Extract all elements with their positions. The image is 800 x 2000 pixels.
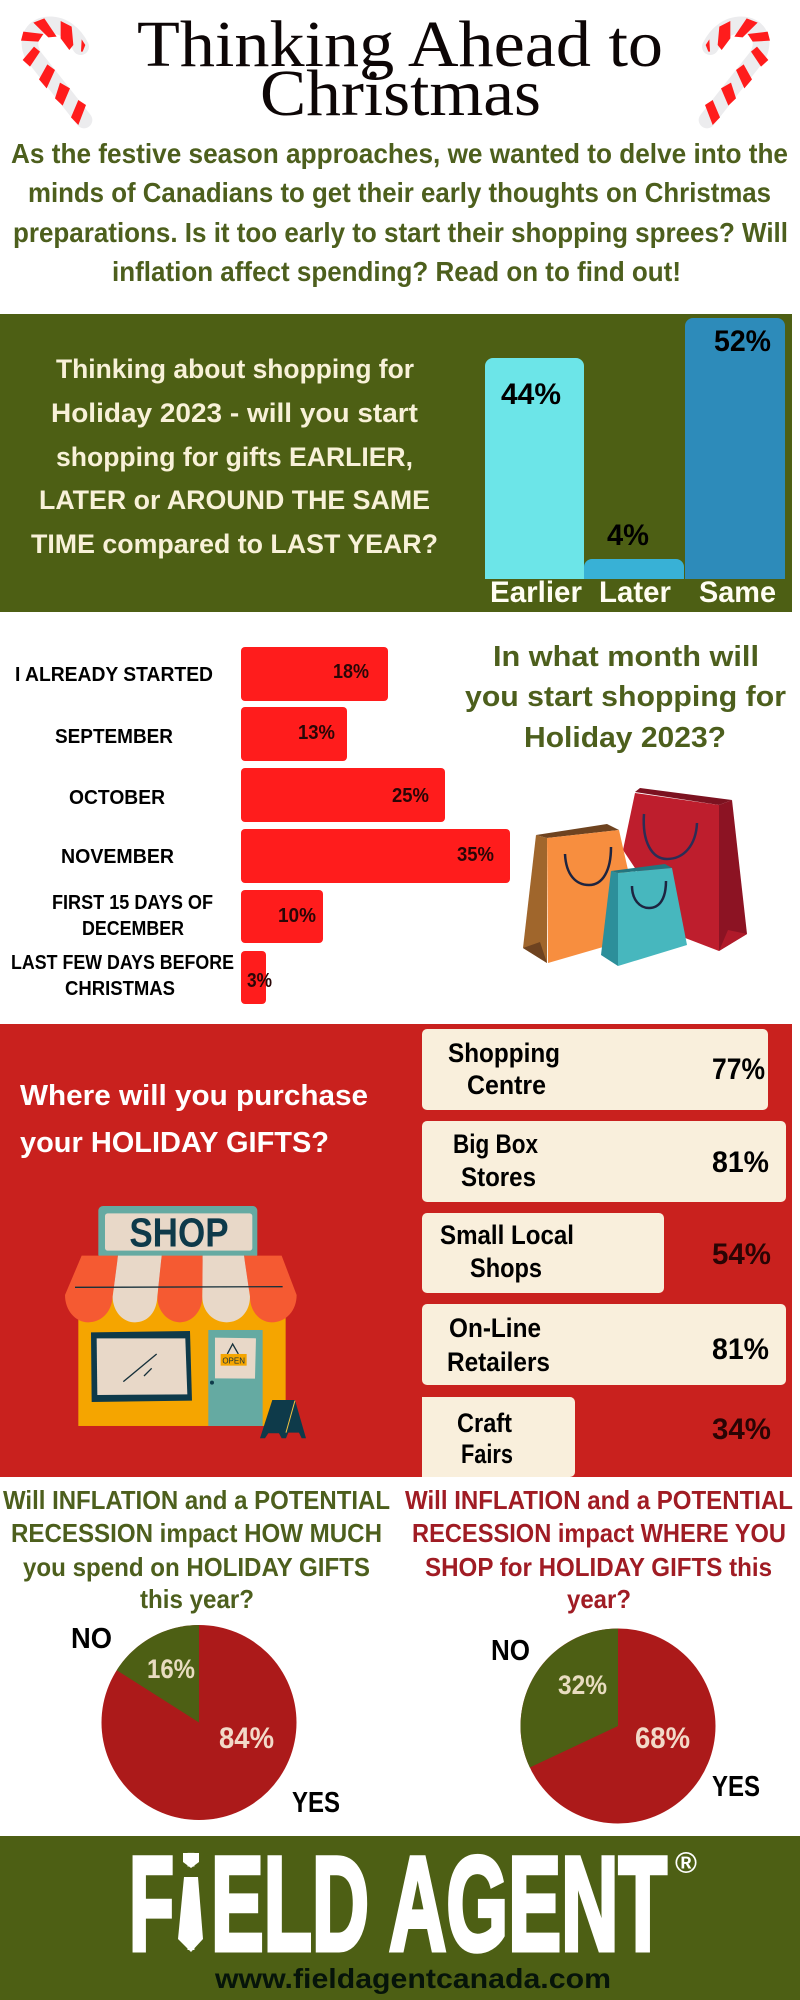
header [11, 8, 788, 287]
heading: purchase question: your HOLIDAY GIFTS? [20, 1127, 329, 1159]
bar: big box stores [422, 1121, 786, 1202]
heading: purchase question: Where will you purchase [20, 1080, 368, 1112]
heading: how much: RECESSION impact HOW MUCH [11, 1518, 382, 1548]
bar: small local shops: Small Local [440, 1220, 574, 1250]
bar: craft fairs: Craft [457, 1408, 512, 1438]
heading: month question: Holiday 2023? [524, 722, 726, 754]
bar: shopping centre: Centre [467, 1070, 546, 1100]
bar: on-line retailers: On-Line [449, 1313, 541, 1343]
pie chart: how much [71, 1623, 340, 1820]
heading: how much: this year? [140, 1584, 254, 1614]
bar chart: months: SEPTEMBER [55, 725, 173, 748]
pie chart: where you shop: YES [712, 1771, 760, 1803]
bar: small local shops [422, 1213, 771, 1293]
panel: inflation where you shop [405, 1485, 793, 1824]
icon: shopping bags [523, 788, 747, 966]
pie chart: how much: 84% [219, 1722, 274, 1755]
heading: month question: In what month will [493, 641, 759, 673]
icon: shop: OPEN [222, 1355, 245, 1365]
bar chart: months: 3% [247, 970, 272, 992]
question text: TIME compared to LAST YEAR? [31, 529, 438, 559]
heading: month question: you start shopping for [465, 681, 786, 713]
bar: big box stores: Stores [461, 1162, 536, 1192]
bar chart: months: FIRST 15 DAYS OF [52, 891, 213, 914]
icon: right candy cane [705, 18, 770, 125]
heading: where you shop: year? [567, 1584, 631, 1614]
pie chart: how much: 16% [147, 1654, 195, 1684]
heading: how much: you spend on HOLIDAY GIFTS [23, 1552, 370, 1582]
heading: month question [465, 641, 786, 754]
bar chart: months: NOVEMBER [61, 845, 174, 868]
panel: start month [11, 641, 786, 1004]
bar chart: months: 35% [457, 844, 494, 866]
bar: big box stores: Big Box [453, 1129, 538, 1159]
title [137, 8, 663, 130]
pie chart: where you shop: 32% [558, 1670, 607, 1700]
bar chart: months [11, 647, 510, 1004]
logo: field agent: i [184, 1830, 198, 1979]
intro text [11, 138, 788, 287]
bar: craft fairs: 34% [712, 1413, 771, 1446]
bar chart: earlier later same [485, 318, 785, 609]
bar chart: months: I ALREADY STARTED [15, 663, 213, 686]
bar: on-line retailers: 81% [712, 1333, 769, 1366]
pie chart: how much: NO [71, 1623, 112, 1655]
bar: shopping centre: 77% [712, 1053, 765, 1086]
intro text: minds of Canadians to get their early thoughts on Christmas [28, 177, 771, 208]
bar chart: months: LAST FEW DAYS BEFORE [11, 951, 234, 974]
heading: how much [3, 1485, 390, 1614]
bar: small local shops: Shops [470, 1253, 542, 1283]
bar chart: months: 25% [392, 785, 429, 807]
bar: craft fairs [422, 1397, 771, 1477]
logo: field agent: ELD [211, 1830, 369, 1979]
bar chart: months: 13% [298, 722, 335, 744]
bar chart: months: DECEMBER [82, 917, 184, 940]
bar: on-line retailers [422, 1304, 786, 1385]
pie chart: how much: YES [292, 1787, 340, 1819]
bar chart: months: 10% [278, 905, 316, 927]
website url: www.fieldagentcanada.com [214, 1963, 611, 1994]
question text: Thinking about shopping for [56, 354, 414, 384]
title: Christmas [260, 57, 541, 130]
icon: shop [65, 1206, 306, 1438]
bar chart: earlier later same: 44% [501, 378, 561, 411]
bar: on-line retailers: Retailers [447, 1347, 550, 1377]
question text: Holiday 2023 - will you start [51, 398, 418, 428]
logo: field agent: ® [675, 1847, 697, 1880]
heading: purchase question [20, 1080, 368, 1159]
intro text: inflation affect spending? Read on to find out! [112, 256, 681, 287]
bar chart: earlier later same: 52% [714, 325, 771, 358]
question text: shopping for gifts EARLIER, [56, 442, 413, 472]
heading: how much: Will INFLATION and a POTENTIAL [3, 1485, 390, 1515]
logo: field agent [129, 1830, 697, 1979]
question text: LATER or AROUND THE SAME [39, 485, 430, 515]
bar: craft fairs: Fairs [461, 1439, 513, 1469]
icon: left candy cane [21, 18, 86, 125]
bar chart: months: CHRISTMAS [65, 977, 175, 1000]
bar chart: earlier later same: Later [599, 576, 671, 609]
bar: shopping centre [422, 1029, 768, 1110]
logo: field agent: F [129, 1830, 174, 1979]
footer [0, 1830, 800, 2000]
question text [31, 354, 438, 559]
bar chart: earlier later same: Same [699, 576, 776, 609]
bar: big box stores: 81% [712, 1146, 769, 1179]
pie chart: where you shop [491, 1628, 760, 1824]
bar: shopping centre: Shopping [448, 1038, 560, 1068]
bar: small local shops: 54% [712, 1238, 771, 1271]
heading: where you shop [405, 1485, 793, 1614]
title: Thinking Ahead to [137, 8, 663, 81]
bar chart: earlier later same: Earlier [490, 576, 582, 609]
heading: where you shop: SHOP for HOLIDAY GIFTS this [425, 1552, 772, 1582]
bar chart: months: 18% [333, 661, 369, 683]
pie chart: where you shop: NO [491, 1635, 530, 1667]
panel: shopping earlier or later [0, 314, 792, 612]
panel: where will you purchase [0, 1024, 792, 1477]
panel: inflation how much [3, 1485, 390, 1820]
bar chart: earlier later same: 4% [607, 519, 649, 552]
pie chart: where you shop: 68% [635, 1722, 690, 1755]
icon: shop: SHOP [129, 1210, 229, 1256]
bar chart: months: OCTOBER [69, 786, 165, 809]
